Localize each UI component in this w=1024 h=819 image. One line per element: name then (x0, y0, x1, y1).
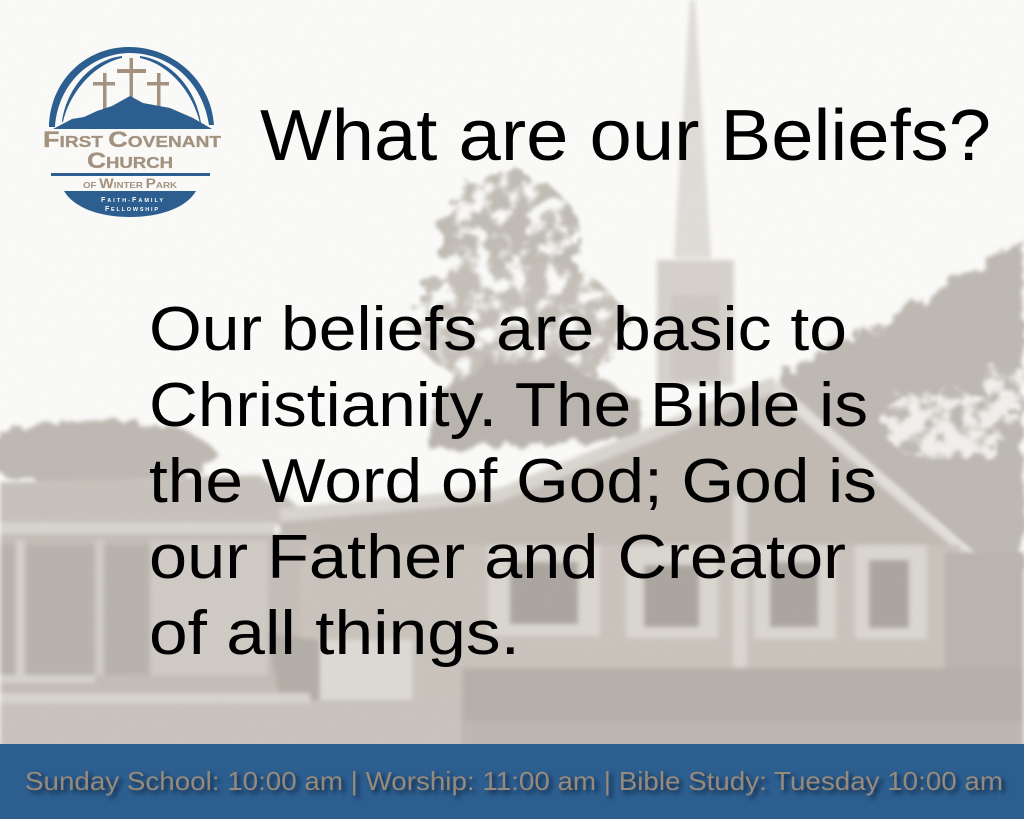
icon: mountain (53, 96, 212, 129)
service times: Sunday School: 10:00 am | Worship: 11:00 am | Bible Study: Tuesday 10:00 am (25, 766, 1003, 796)
body text (149, 295, 877, 668)
logo location: OF WINTER PARK (83, 176, 178, 191)
title: What are our Beliefs? (260, 96, 991, 176)
windows (488, 545, 600, 636)
body text: Christianity. The Bible is (149, 371, 868, 440)
logo tagline (101, 197, 163, 213)
icon: three crosses (93, 58, 169, 109)
logo tagline: F ELLOWSHIP (105, 206, 158, 213)
tree highlights (883, 365, 1024, 461)
porch (0, 545, 150, 675)
logo name: FIRST COVENANT (43, 127, 222, 152)
building walls (0, 534, 320, 704)
main roof and gable (280, 379, 973, 552)
icon: inner arcs (62, 56, 201, 123)
body text: the Word of God; God is (149, 447, 877, 516)
body text: our Father and Creator (149, 523, 846, 592)
body text: of all things. (149, 599, 520, 668)
logo: First Covenant Church of Winter Park: CHURCH (87, 148, 173, 173)
logo tagline: F AITH- F AMILY (101, 197, 163, 204)
ground and railing (0, 700, 1024, 750)
left roof (0, 475, 320, 525)
body text: Our beliefs are basic to (149, 295, 847, 364)
logo divider (51, 173, 210, 176)
trees (415, 173, 925, 390)
door section (150, 540, 268, 675)
icon: outer arc (49, 47, 214, 127)
footer bar (0, 744, 1024, 819)
steeple (674, 0, 711, 258)
logo: First Covenant Church of Winter Park (43, 47, 222, 217)
logo tagline badge (64, 191, 196, 217)
